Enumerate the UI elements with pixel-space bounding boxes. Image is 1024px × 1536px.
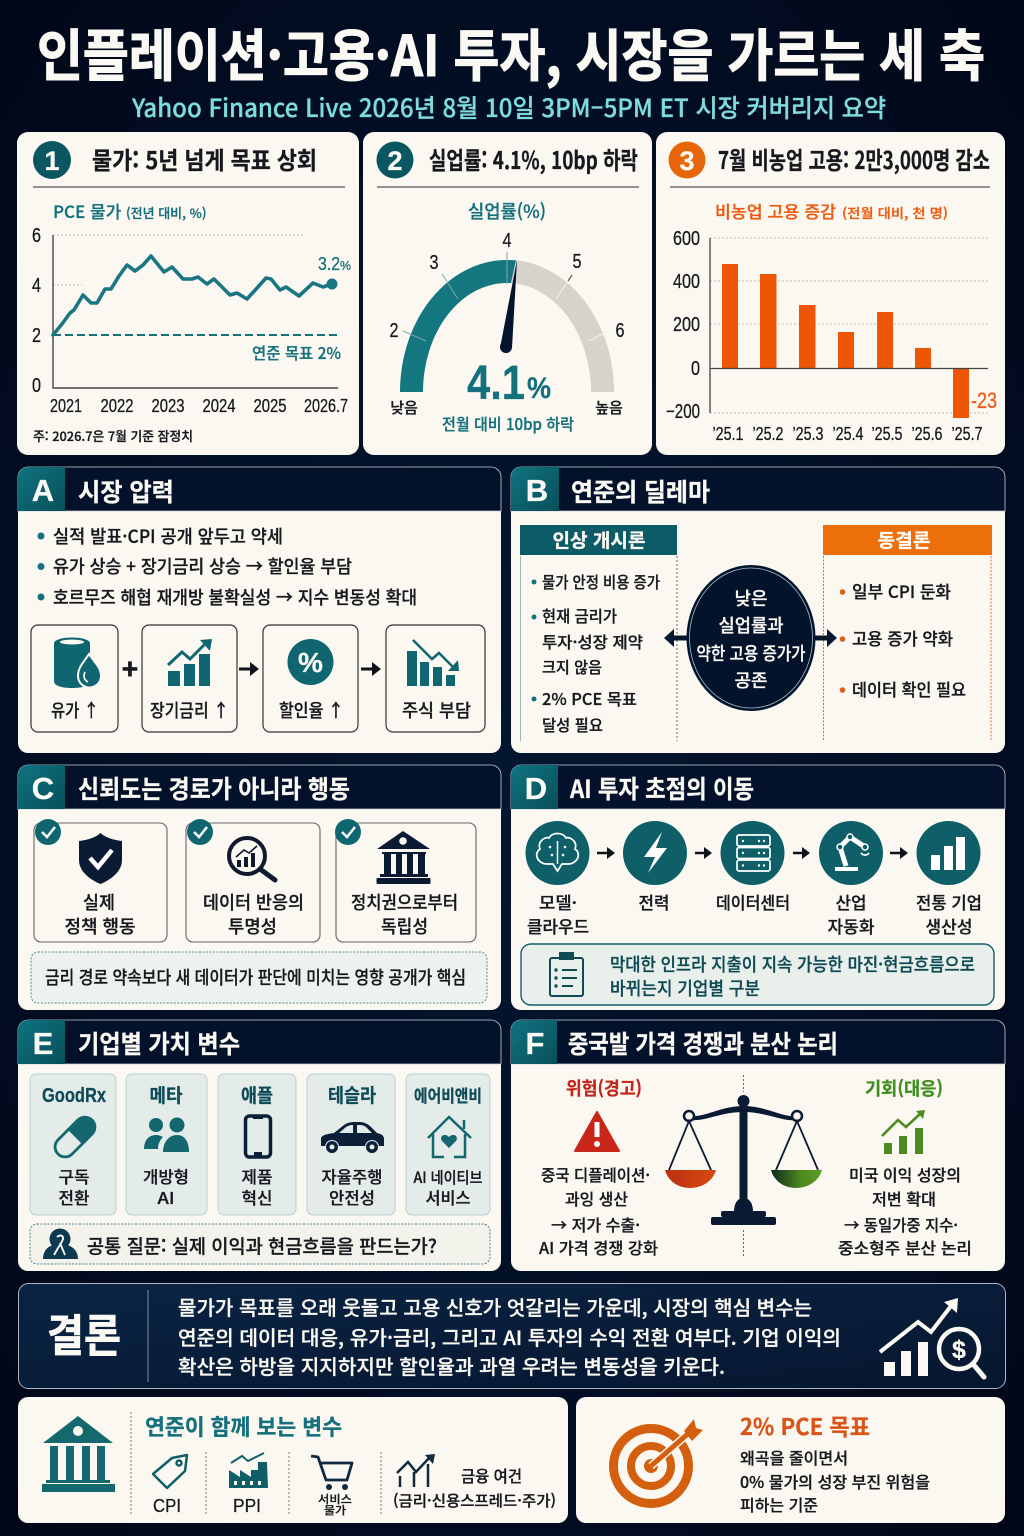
box: 유가: 유가 ↑ xyxy=(51,697,99,723)
card: 테슬라: 안전성 xyxy=(329,1185,375,1209)
column: 위험: 위험(경고) xyxy=(566,1075,642,1101)
bar chart: 고용: 0 xyxy=(691,358,700,380)
subtitle: Yahoo Finance Live 2026년 8월 10일 3PM–5PM ET 시장 커버리지 요약 xyxy=(131,89,886,125)
card: 실제 정책 행동: 정책 행동 xyxy=(64,913,136,939)
card: 애플: 혁신 xyxy=(242,1185,272,1209)
line chart: PCE: 4 xyxy=(32,275,41,297)
badge A xyxy=(18,467,65,511)
arrow xyxy=(361,662,381,676)
badge F: F xyxy=(526,1026,544,1061)
column: 동결론: 데이터 확인 필요 xyxy=(852,676,966,701)
bullet list: 유가 상승 + 장기금리 상승 → 할인율 부담 xyxy=(53,553,352,579)
panel: 연준이 함께 보는 변수 xyxy=(18,1397,568,1523)
column: 인상 개시론 xyxy=(520,525,677,741)
chart title: (전월 대비, 천 명) xyxy=(842,203,948,222)
step: 산업 자동화: 산업 xyxy=(836,889,866,914)
icon: target xyxy=(614,1419,703,1504)
card: 애플: 제품 xyxy=(242,1164,272,1188)
card: GoodRx: 전환 xyxy=(58,1185,90,1209)
bar chart: 고용 xyxy=(666,228,997,444)
bar chart: 고용: -23 xyxy=(971,388,997,413)
number badge 1: 1 xyxy=(44,146,60,176)
step: 모델 클라우드: 모델· xyxy=(539,889,577,914)
card: 에어비앤비 xyxy=(406,1074,490,1215)
column: 인상 개시론: 2% PCE 목표 xyxy=(542,686,637,710)
check badge xyxy=(335,819,361,845)
step: 데이터센터: 데이터센터 xyxy=(716,889,790,914)
column: 위험 xyxy=(539,1075,658,1259)
bar chart: 고용: 400 xyxy=(673,271,700,293)
body text xyxy=(740,1445,930,1516)
line chart: PCE: 3.2 xyxy=(318,254,340,274)
icon: car xyxy=(321,1122,384,1154)
column: 위험: AI 가격 경쟁 강화 xyxy=(539,1235,658,1259)
card: GoodRx: 구독 xyxy=(58,1164,90,1188)
heading A: 시장 압력 xyxy=(78,473,174,509)
arrow xyxy=(597,847,615,859)
gauge chart: 2 xyxy=(390,320,398,342)
column: 기회 xyxy=(838,1075,972,1259)
gauge value: 4.1 xyxy=(467,357,525,410)
conclusion text: 물가가 목표를 오래 웃돌고 고용 신호가 엇갈리는 가운데, 시장의 핵심 변수는 xyxy=(178,1292,812,1321)
item: CPI xyxy=(153,1455,187,1516)
column: 기회: → 동일가중 지수· xyxy=(844,1212,958,1236)
step: 전통 기업: 생산성 xyxy=(926,913,972,938)
callout xyxy=(31,952,487,1003)
chart title: PCE 물가 (전년 대비, %) xyxy=(53,198,206,223)
icon: growth chart xyxy=(882,1110,925,1154)
line chart: PCE: 2021 xyxy=(50,396,82,416)
card: 메타 xyxy=(126,1074,207,1215)
icon: clipboard xyxy=(550,953,583,996)
card: 에어비앤비: 에어비앤비 xyxy=(414,1082,482,1107)
panel D: AI 투자 xyxy=(511,765,1005,1010)
arrow xyxy=(695,847,712,859)
icon: falling chart xyxy=(407,640,459,686)
card: GoodRx xyxy=(30,1074,116,1215)
bullet list: 실적 발표·CPI 공개 앞두고 약세 xyxy=(53,523,283,549)
heading B: 연준의 딜레마 xyxy=(571,473,710,509)
bullet list: 호르무즈 해협 재개방 불확실성 → 지수 변동성 확대 xyxy=(53,584,417,610)
panel: 실업률 xyxy=(363,132,652,455)
icon: oil barrel xyxy=(54,638,101,688)
center circle: 약한 고용 증가가 xyxy=(696,640,806,666)
callout: 공통 질문: 공통 질문: 실제 이익과 현금흐름을 판드는가? xyxy=(87,1232,437,1259)
callout xyxy=(521,944,994,1005)
column: 동결론 xyxy=(823,525,992,741)
card: 실제 정책 행동 xyxy=(34,819,167,942)
plus sign: + xyxy=(122,648,138,687)
panel: 결론 xyxy=(18,1284,1006,1388)
check badge xyxy=(187,819,213,845)
heading: 실업률: 실업률: 4.1%, 10bp 하락 xyxy=(429,141,638,176)
chart title: 비농업 고용 증감 xyxy=(715,198,836,223)
panel B: 연준의 딜레마 xyxy=(511,467,1005,753)
card: 테슬라: 자율주행 xyxy=(322,1164,382,1188)
item: PPI xyxy=(229,1453,268,1516)
card: 독립성 xyxy=(335,819,476,942)
icon: cart xyxy=(311,1456,352,1490)
column: 기회: 저변 확대 xyxy=(872,1186,936,1210)
column: 동결론: 고용 증가 약화 xyxy=(852,625,953,650)
gauge high label: 높음 xyxy=(595,397,623,418)
badge C: C xyxy=(32,771,54,806)
icon: bank xyxy=(376,831,430,884)
bar chart: 고용: ’25.1 xyxy=(712,424,744,444)
arrow xyxy=(890,847,908,859)
card: 에어비앤비: 서비스 xyxy=(426,1185,470,1209)
icon: price tag xyxy=(153,1455,187,1488)
gauge chart xyxy=(390,230,624,392)
step: 전통 기업: 전통 기업 xyxy=(916,889,982,914)
badge F xyxy=(511,1020,557,1064)
callout: 바뀌는지 기업별 구분 xyxy=(610,975,760,1001)
panel A: 시장 압력 xyxy=(18,467,501,753)
badge B xyxy=(511,467,559,511)
card: 데이터 반응: 투명성 xyxy=(228,913,277,939)
heading C: 신뢰도는 경로가 아니라 행동 xyxy=(78,770,350,806)
icon: shield xyxy=(79,833,122,884)
heading E: 기업별 가치 변수 xyxy=(78,1025,240,1061)
card: 애플: 애플 xyxy=(241,1081,273,1108)
item: PPI: PPI xyxy=(233,1496,261,1516)
bar chart: 고용: ’25.6 xyxy=(912,424,942,444)
number badge 2 xyxy=(376,142,414,178)
conclusion text: 확산은 하방을 지지하지만 할인율과 과열 우려는 변동성을 키운다. xyxy=(178,1351,725,1380)
column: 위험: 중국 디플레이션· xyxy=(541,1162,650,1186)
step: 산업 자동화 xyxy=(819,821,883,938)
heading D: AI 투자 초점의 이동 xyxy=(569,770,754,806)
line chart: PCE: 6 xyxy=(32,225,41,247)
gauge value: % xyxy=(527,372,551,405)
icon: person xyxy=(43,1228,78,1259)
column: 기회: 중소형주 분산 논리 xyxy=(838,1235,972,1259)
panel C: 신뢰도 xyxy=(18,765,501,1010)
box: 할인율 xyxy=(263,625,358,732)
gauge low label: 낮음 xyxy=(390,397,418,418)
box: 유가 xyxy=(31,625,118,732)
number badge 2: 2 xyxy=(387,146,403,176)
line chart: PCE: 2025 xyxy=(254,396,286,416)
item: 서비스 물가 xyxy=(311,1456,352,1518)
arrow xyxy=(239,662,259,676)
line chart: PCE: 연준 목표 2% xyxy=(252,340,341,364)
line chart: PCE: 2 xyxy=(32,325,41,347)
badge D xyxy=(511,765,558,809)
body text: 피하는 기준 xyxy=(740,1492,818,1516)
item: 서비스 물가: 물가 xyxy=(324,1502,346,1518)
callout: 공통 질문 xyxy=(30,1224,490,1264)
box: 장기금리: 장기금리 ↑ xyxy=(150,697,229,723)
bar chart: 고용: −200 xyxy=(666,401,700,423)
bar chart: 고용: ’25.4 xyxy=(832,424,864,444)
heading F: 중국발 가격 경쟁과 분산 논리 xyxy=(568,1025,838,1061)
icon: home heart xyxy=(428,1117,471,1157)
card: 메타: 메타 xyxy=(150,1081,183,1108)
bar chart: 고용: ’25.5 xyxy=(872,424,902,444)
heading: 물가: 물가: 5년 넘게 목표 상회 xyxy=(92,141,317,176)
card: GoodRx: GoodRx xyxy=(42,1085,106,1107)
icon: factory xyxy=(229,1453,268,1488)
chart title: 실업률(%) xyxy=(468,198,546,224)
badge D: D xyxy=(525,771,547,806)
bar chart: 고용: ’25.3 xyxy=(792,424,824,444)
conclusion text: 연준의 데이터 대응, 유가·금리, 그리고 AI 투자의 수익 전환 여부다. 기업 이익의 xyxy=(178,1322,841,1351)
badge A: A xyxy=(32,473,54,508)
badge E: E xyxy=(33,1026,53,1061)
item: 금융 여건: 금융 여건 xyxy=(461,1463,522,1487)
line chart: PCE xyxy=(32,225,351,416)
icon: rising chart xyxy=(168,639,212,686)
body text: 0% 물가의 성장 부진 위험을 xyxy=(740,1469,930,1493)
item: CPI: CPI xyxy=(153,1496,181,1516)
panel: 물가 xyxy=(17,132,359,455)
column: 인상 개시론: 물가 안정 비용 증가 xyxy=(542,569,660,593)
badge E xyxy=(18,1020,65,1064)
icon: capsule xyxy=(51,1113,99,1161)
card: 독립성: 독립성 xyxy=(381,913,428,939)
line chart: PCE: 2022 xyxy=(100,396,134,416)
card: 테슬라: 테슬라 xyxy=(328,1081,376,1108)
icon: trend lines xyxy=(397,1454,435,1487)
box: 주식 부담: 주식 부담 xyxy=(402,697,471,723)
step: 전력 xyxy=(623,821,687,914)
icon: warning xyxy=(575,1112,619,1151)
icon: chart and magnifier: $ xyxy=(952,1336,966,1364)
step: 전통 기업 xyxy=(916,821,982,938)
badge B: B xyxy=(526,473,548,508)
bar chart: 고용: ’25.7 xyxy=(952,424,982,444)
gauge chart: 3 xyxy=(430,252,438,274)
column: 기회: 미국 이익 성장의 xyxy=(849,1162,961,1186)
column: 기회: 기회(대응) xyxy=(865,1075,943,1101)
badge C xyxy=(18,765,65,809)
panel: 비농업 고용 xyxy=(656,132,1005,455)
step: 모델 클라우드: 클라우드 xyxy=(527,913,589,938)
box: 장기금리 xyxy=(142,625,237,732)
column: 인상 개시론: 투자·성장 제약 xyxy=(542,629,643,653)
icon: phone xyxy=(246,1116,270,1157)
card: 테슬라 xyxy=(307,1074,395,1215)
column: 인상 개시론: 인상 개시론 xyxy=(552,526,646,553)
bullet list xyxy=(38,523,417,610)
panel E: 기업별 가치 변수 xyxy=(18,1020,501,1271)
card: 메타: 개방형 xyxy=(143,1164,189,1188)
icon: chart and magnifier xyxy=(880,1298,984,1377)
callout: 막대한 인프라 지출이 지속 가능한 마진·현금흐름으로 xyxy=(610,951,975,977)
gauge chart: 6 xyxy=(616,320,624,342)
card: 독립성: 정치권으로부터 xyxy=(351,889,458,915)
gauge chart: 4 xyxy=(502,230,512,252)
column: 위험: 과잉 생산 xyxy=(565,1186,628,1210)
step: 모델 클라우드 xyxy=(526,821,590,938)
column: 인상 개시론: 크지 않음 xyxy=(542,654,602,678)
line chart: PCE: % xyxy=(340,258,351,273)
line chart: PCE: 2024 xyxy=(202,396,236,416)
line chart: PCE: 2026.7 xyxy=(304,396,348,416)
center circle: 공존 xyxy=(734,667,768,693)
panel: 2% PCE 목표 xyxy=(576,1397,1005,1523)
item: 서비스 물가: 서비스 xyxy=(318,1491,352,1507)
number badge 3: 3 xyxy=(679,146,695,176)
heading: 결론: 결론 xyxy=(47,1300,121,1364)
center circle: 실업률과 xyxy=(718,612,784,638)
icon: magnifier chart xyxy=(229,838,275,880)
item: 금융 여건 xyxy=(393,1454,556,1511)
line chart: PCE: 0 xyxy=(32,375,41,397)
number badge 3 xyxy=(668,142,706,178)
body text: 왜곡을 줄이면서 xyxy=(740,1445,848,1469)
step: 데이터센터 xyxy=(716,821,790,914)
conclusion text xyxy=(178,1292,841,1380)
icon: percent: % xyxy=(298,647,323,678)
footnote: 주: 2026.7은 7월 기준 잠정치 xyxy=(33,426,193,445)
bar chart: 고용: ’25.2 xyxy=(752,424,784,444)
item: 금융 여건: (금리·신용스프레드·주가) xyxy=(393,1490,556,1511)
bar chart: 고용: 200 xyxy=(673,314,700,336)
panel F: 중국발 가격 경쟁 xyxy=(511,1020,1005,1271)
card: 애플 xyxy=(218,1074,296,1215)
column: 동결론: 일부 CPI 둔화 xyxy=(852,578,951,603)
column: 인상 개시론: 현재 금리가 xyxy=(542,603,617,627)
column: 동결론: 동결론 xyxy=(878,526,930,553)
center circle xyxy=(686,565,816,711)
chart title xyxy=(715,198,948,223)
arrow xyxy=(793,847,810,859)
icon: scales xyxy=(665,1075,822,1258)
number badge 1 xyxy=(33,141,71,179)
heading: 2% PCE 목표 xyxy=(740,1408,870,1442)
column: 인상 개시론: 달성 필요 xyxy=(542,712,603,736)
gauge note: 전월 대비 10bp 하락 xyxy=(442,411,574,435)
card: 메타: AI xyxy=(158,1185,174,1209)
step: 산업 자동화: 자동화 xyxy=(828,913,875,938)
callout: 금리 경로 약속보다 새 데이터가 판단에 미치는 영향 공개가 핵심 xyxy=(45,964,466,990)
line chart: PCE: 2023 xyxy=(152,396,184,416)
card: 데이터 반응 xyxy=(186,819,320,942)
box: 주식 부담 xyxy=(386,625,485,732)
card: 데이터 반응: 데이터 반응의 xyxy=(203,889,304,915)
card: 에어비앤비: AI 네이티브 xyxy=(414,1166,482,1188)
step: 전력: 전력 xyxy=(638,889,670,914)
gauge chart: 5 xyxy=(572,251,582,273)
icon: bank xyxy=(42,1416,115,1492)
icon: people xyxy=(144,1118,189,1152)
card: 실제 정책 행동: 실제 xyxy=(83,889,115,915)
center circle: 낮은 xyxy=(734,585,768,611)
heading: 연준이 함께 보는 변수 xyxy=(145,1410,342,1442)
arrows: both directions xyxy=(664,629,837,647)
check badge xyxy=(35,819,61,845)
box: 할인율: 할인율 ↑ xyxy=(279,697,344,723)
bar chart: 고용: 600 xyxy=(673,228,700,250)
column: 위험: → 저가 수출· xyxy=(551,1212,640,1236)
